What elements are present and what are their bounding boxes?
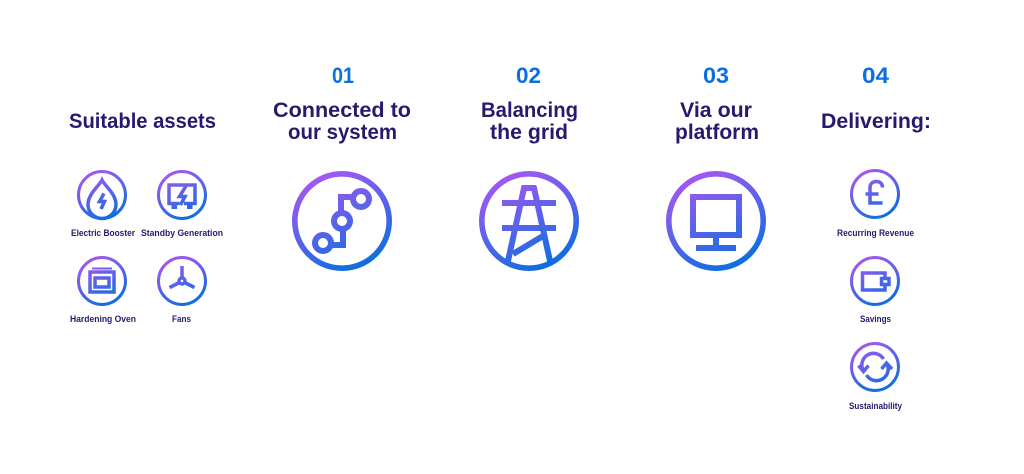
number: 04: 04 — [862, 63, 890, 88]
icon: sustainability — [852, 344, 898, 390]
heading: connected to our system: Connected to — [273, 99, 411, 122]
icon: pylon — [482, 174, 576, 268]
icon: electric booster — [78, 172, 126, 218]
heading: balancing the grid: Balancing — [481, 99, 578, 122]
panel: suitable assets — [69, 110, 223, 324]
panel: balancing the grid — [481, 63, 578, 268]
panel: delivering — [821, 63, 931, 411]
icon: monitor — [669, 174, 763, 268]
panel: via our platform — [669, 63, 763, 268]
icon: wallet — [852, 258, 898, 304]
icon: connected nodes — [295, 174, 389, 268]
heading: connected to our system: our system — [288, 121, 397, 144]
heading: suitable assets: Suitable assets — [69, 110, 216, 133]
heading: balancing the grid: the grid — [490, 121, 568, 144]
number: 01: 01 — [332, 63, 354, 88]
heading: delivering: Delivering: — [821, 110, 931, 133]
label: electric booster: Electric Booster — [71, 228, 135, 238]
label: fans: Fans — [172, 314, 191, 324]
label: hardening oven: Hardening Oven — [70, 314, 136, 324]
heading: via our platform: Via our — [680, 99, 752, 122]
icon: pound — [852, 170, 898, 218]
icon: standby generation — [158, 172, 206, 218]
heading: via our platform: platform — [675, 121, 759, 144]
number: 03: 03 — [703, 63, 729, 88]
panel: connected to our system — [273, 63, 411, 268]
icon: fans — [158, 258, 206, 304]
number: 02: 02 — [516, 63, 541, 88]
label: recurring revenue: Recurring Revenue — [837, 228, 914, 238]
label: sustainability: Sustainability — [849, 401, 902, 411]
label: savings: Savings — [860, 314, 891, 324]
label: standby generation: Standby Generation — [141, 228, 223, 238]
icon: hardening oven — [78, 258, 126, 304]
